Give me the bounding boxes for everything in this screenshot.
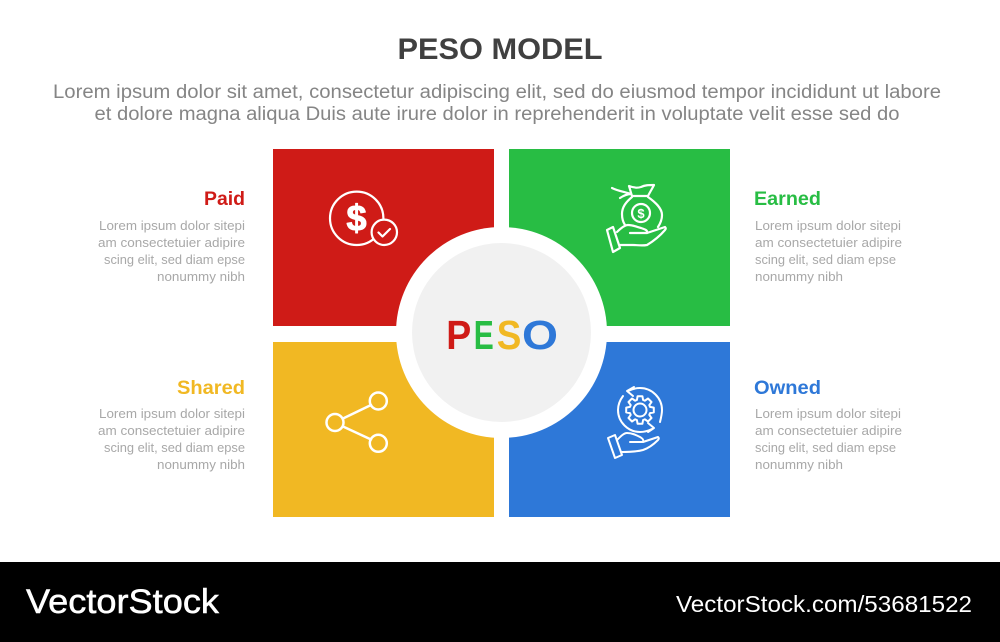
body: Paid: Lorem ipsum dolor sitepi — [99, 218, 245, 233]
body: Paid — [98, 218, 245, 284]
body: Shared: am consectetuier adipire — [98, 423, 245, 438]
subtitle text: Lorem ipsum dolor sit amet, consectetur adipiscing elit, sed do eiusmod tempor incididunt ut labore — [53, 82, 941, 103]
heading: Owned: Owned — [754, 378, 821, 399]
body: Earned: nonummy nibh — [755, 269, 843, 284]
body: Paid: scing elit, sed diam epse — [104, 252, 245, 267]
body: Shared: scing elit, sed diam epse — [104, 440, 245, 455]
panel: shared quadrant — [273, 342, 494, 517]
body: Earned: scing elit, sed diam epse — [755, 252, 896, 267]
center label: PESO: P — [446, 312, 471, 358]
subtitle text: et dolore magna aliqua Duis aute irure dolor in reprehenderit in voluptate velit esse sed do — [94, 104, 899, 125]
icon: money bag on hand: $ — [637, 206, 645, 221]
footer band — [0, 562, 1000, 642]
body: Earned: Lorem ipsum dolor sitepi — [755, 218, 901, 233]
text block: Paid — [98, 189, 245, 284]
panel: owned quadrant — [509, 342, 730, 517]
footer logo: VectorStock: VectorStock — [26, 583, 220, 621]
icon: share nodes — [326, 392, 387, 452]
body: Owned: scing elit, sed diam epse — [755, 440, 896, 455]
body: Owned: nonummy nibh — [755, 457, 843, 472]
body: Earned: am consectetuier adipire — [755, 235, 902, 250]
center label: PESO: E — [474, 312, 494, 358]
panel: earned quadrant — [509, 149, 730, 326]
panel: paid quadrant — [273, 149, 494, 326]
footer url: VectorStock.com/53681522 — [676, 591, 972, 617]
body: Earned — [755, 218, 902, 284]
body: Paid: am consectetuier adipire — [98, 235, 245, 250]
center label: PESO: O — [522, 312, 558, 358]
icon: money bag on hand — [607, 185, 666, 252]
body: Paid: nonummy nibh — [157, 269, 245, 284]
heading: Shared: Shared — [177, 378, 245, 399]
body: Shared: Lorem ipsum dolor sitepi — [99, 406, 245, 421]
title: PESO MODEL — [398, 33, 602, 66]
center label: PESO — [446, 312, 558, 358]
icon: dollar coin with check: $ — [346, 198, 367, 238]
heading: Earned: Earned — [754, 189, 821, 210]
text block: Owned — [754, 378, 902, 472]
icon: dollar coin with check — [330, 192, 397, 245]
subtitle text — [53, 82, 941, 125]
body: Shared — [98, 406, 245, 472]
text block: Shared — [98, 378, 245, 472]
heading: Paid: Paid — [204, 189, 245, 210]
body: Owned: am consectetuier adipire — [755, 423, 902, 438]
icon: gear with cycle arrows on hand — [608, 387, 662, 458]
body: Owned — [755, 406, 902, 472]
text block: Earned — [754, 189, 902, 284]
body: Owned: Lorem ipsum dolor sitepi — [755, 406, 901, 421]
body: Shared: nonummy nibh — [157, 457, 245, 472]
center circle — [396, 227, 607, 438]
center label: PESO: S — [497, 312, 521, 358]
